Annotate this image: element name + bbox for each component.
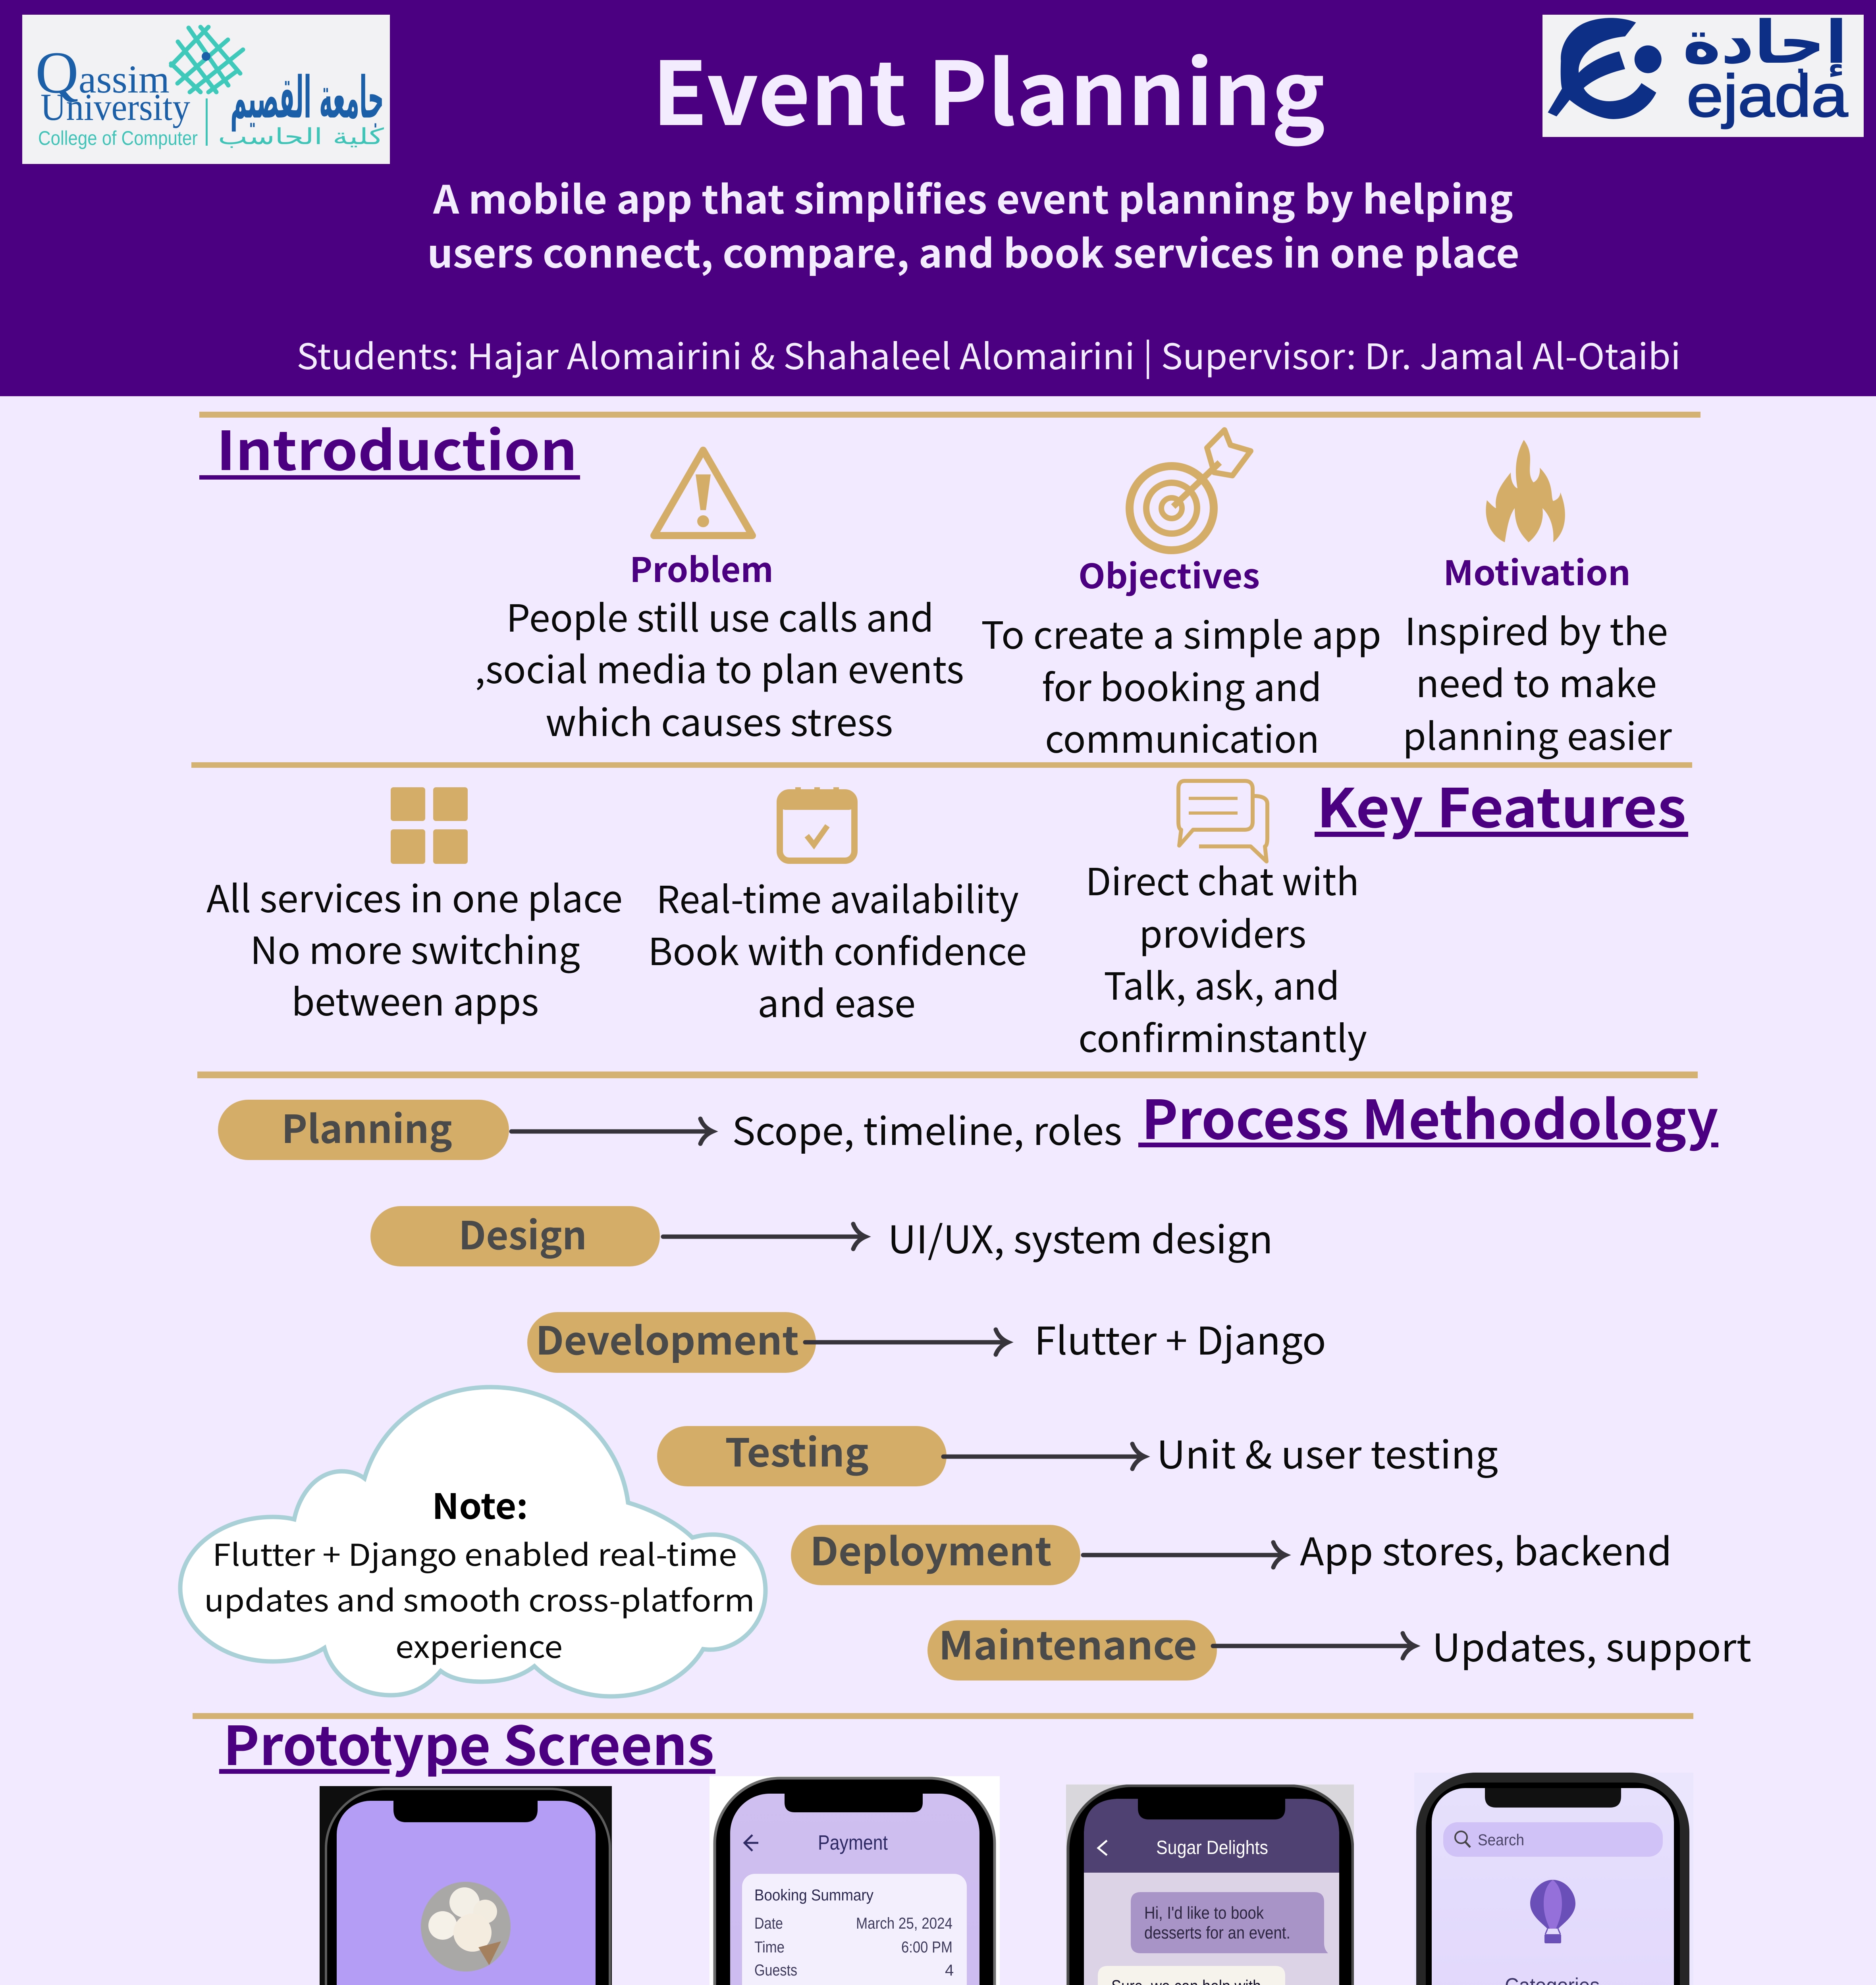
screen: chat: Sugar Delights xyxy=(1156,1837,1268,1858)
callout: note cloud xyxy=(180,1387,765,1696)
title: Event Planning xyxy=(652,23,1325,150)
icon: flame xyxy=(1486,440,1565,542)
subtitle: users connect, compare, and book services in one place xyxy=(427,223,1519,279)
message bubble: desserts for an event. xyxy=(1144,1923,1290,1943)
step: development: Development xyxy=(536,1310,799,1366)
card: booking summary: 6:00 PM xyxy=(901,1939,952,1956)
step: design xyxy=(370,1204,1273,1266)
step: deployment: Deployment xyxy=(810,1521,1052,1576)
message bubble xyxy=(1131,1892,1328,1953)
feature: availability: Book with confidence xyxy=(648,922,1027,976)
heading: Introduction: Introduction xyxy=(216,408,577,486)
panel: prototype screens xyxy=(219,1703,1693,1985)
step: planning: Planning xyxy=(281,1098,452,1154)
card: booking summary: Booking Summary xyxy=(754,1887,873,1904)
search bar xyxy=(1443,1822,1663,1857)
screen: payment xyxy=(710,1776,1000,1985)
search bar: Search xyxy=(1478,1831,1524,1849)
feature: chat: providers xyxy=(1139,905,1306,959)
feature: all services: between apps xyxy=(291,973,539,1027)
block: objectives xyxy=(981,549,1381,764)
feature: availability: and ease xyxy=(758,974,916,1028)
block: problem: ,social media to plan events xyxy=(475,640,964,694)
icon: grid xyxy=(391,787,468,864)
feature: chat: Direct chat with xyxy=(1085,852,1359,906)
icon: chat xyxy=(1178,781,1267,861)
credits: Students: Hajar Alomairini & Shahaleel Alomairini | Supervisor: Dr. Jamal Al-Otaibi xyxy=(297,328,1681,380)
step: testing xyxy=(657,1422,1498,1486)
logo: Qassim University: جامعة القصيم xyxy=(230,64,384,132)
screen: chat xyxy=(1066,1785,1354,1985)
card: booking summary: Time xyxy=(754,1939,785,1956)
card: booking summary: March 25, 2024 xyxy=(856,1915,952,1932)
screen: planner profile xyxy=(320,1786,612,1985)
step: development: Flutter + Django xyxy=(1034,1310,1326,1366)
card: booking summary: Date xyxy=(754,1915,783,1932)
icon: calendar xyxy=(780,787,854,861)
screen: payment: Payment xyxy=(818,1831,888,1854)
block: problem: which causes stress xyxy=(546,693,893,747)
feature: all services: No more switching xyxy=(250,921,580,975)
block: objectives: communication xyxy=(1045,710,1319,764)
heading: Process Methodology: Process Methodology xyxy=(1141,1077,1718,1154)
icon: balloon xyxy=(1530,1880,1575,1943)
panel: process methodology xyxy=(180,1077,1751,1696)
block: motivation: Inspired by the xyxy=(1405,602,1668,656)
step: maintenance xyxy=(927,1615,1751,1681)
message bubble xyxy=(1094,1966,1285,1985)
icon: warning xyxy=(654,450,752,536)
logo: Qassim University: Qassim xyxy=(35,40,170,106)
step: development xyxy=(527,1310,1326,1373)
feature: chat: Talk, ask, and xyxy=(1104,957,1340,1011)
logo: Qassim University: University xyxy=(40,86,190,128)
card: booking summary: 4 xyxy=(945,1962,954,1979)
step: planning: Scope, timeline, roles xyxy=(732,1101,1122,1156)
block: objectives: for booking and xyxy=(1042,658,1322,712)
block: objectives: To create a simple app xyxy=(981,606,1381,660)
block: motivation: Motivation xyxy=(1443,546,1631,595)
heading: Prototype Screens: Prototype Screens xyxy=(223,1703,714,1781)
screen: categories xyxy=(1414,1773,1693,1985)
logo: Qassim University: College of Computer xyxy=(38,127,198,149)
block: problem xyxy=(475,543,964,747)
panel: header xyxy=(0,0,1876,396)
icon: lattice emblem xyxy=(171,27,243,92)
feature: chat xyxy=(1078,852,1367,1063)
logo: ejada: ejada xyxy=(1687,62,1848,129)
block: motivation xyxy=(1403,546,1672,761)
step: planning xyxy=(218,1098,1122,1160)
subtitle xyxy=(427,169,1519,279)
feature: availability: Real-time availability xyxy=(656,870,1019,924)
feature: availability xyxy=(648,870,1027,1028)
callout: note cloud: Flutter + Django enabled real-time xyxy=(212,1531,737,1575)
logo: ejada: إجادة xyxy=(1683,8,1847,77)
callout: note cloud: updates and smooth cross-platform xyxy=(204,1576,755,1620)
step: testing: Unit & user testing xyxy=(1157,1424,1498,1480)
step: deployment: App stores, backend xyxy=(1300,1521,1672,1576)
step: maintenance: Maintenance xyxy=(939,1615,1197,1671)
block: objectives: Objectives xyxy=(1078,549,1260,598)
panel: key features xyxy=(206,765,1688,1063)
step: deployment xyxy=(791,1521,1672,1585)
block: motivation: need to make xyxy=(1416,654,1657,708)
block: problem: People still use calls and xyxy=(506,589,934,643)
icon: target xyxy=(1130,430,1251,550)
logo: ejada xyxy=(1542,8,1864,137)
step: design: Design xyxy=(459,1204,587,1260)
callout: note cloud: Note: xyxy=(432,1479,528,1529)
panel: introduction xyxy=(199,408,1672,764)
step: design: UI/UX, system design xyxy=(888,1209,1273,1264)
feature: all services xyxy=(206,869,623,1027)
step: maintenance: Updates, support xyxy=(1432,1617,1751,1673)
message bubble: Hi, I'd like to book xyxy=(1144,1903,1264,1923)
feature: chat: confirminstantly xyxy=(1078,1009,1367,1063)
heading: Key Features: Key Features xyxy=(1317,765,1686,843)
block: motivation: planning easier xyxy=(1403,707,1672,761)
logo: Qassim University: كلية الحاسب xyxy=(218,124,384,150)
logo: Qassim University xyxy=(22,15,390,164)
subtitle: A mobile app that simplifies event planning by helping xyxy=(433,169,1513,225)
icon: ejada mark xyxy=(1548,18,1662,119)
feature: all services: All services in one place xyxy=(206,869,623,923)
card: booking summary xyxy=(742,1874,967,1985)
avatar xyxy=(421,1882,511,1972)
step: testing: Testing xyxy=(725,1422,869,1478)
callout: note cloud: experience xyxy=(395,1623,563,1667)
card: booking summary: Guests xyxy=(754,1962,797,1979)
block: problem: Problem xyxy=(630,543,773,592)
